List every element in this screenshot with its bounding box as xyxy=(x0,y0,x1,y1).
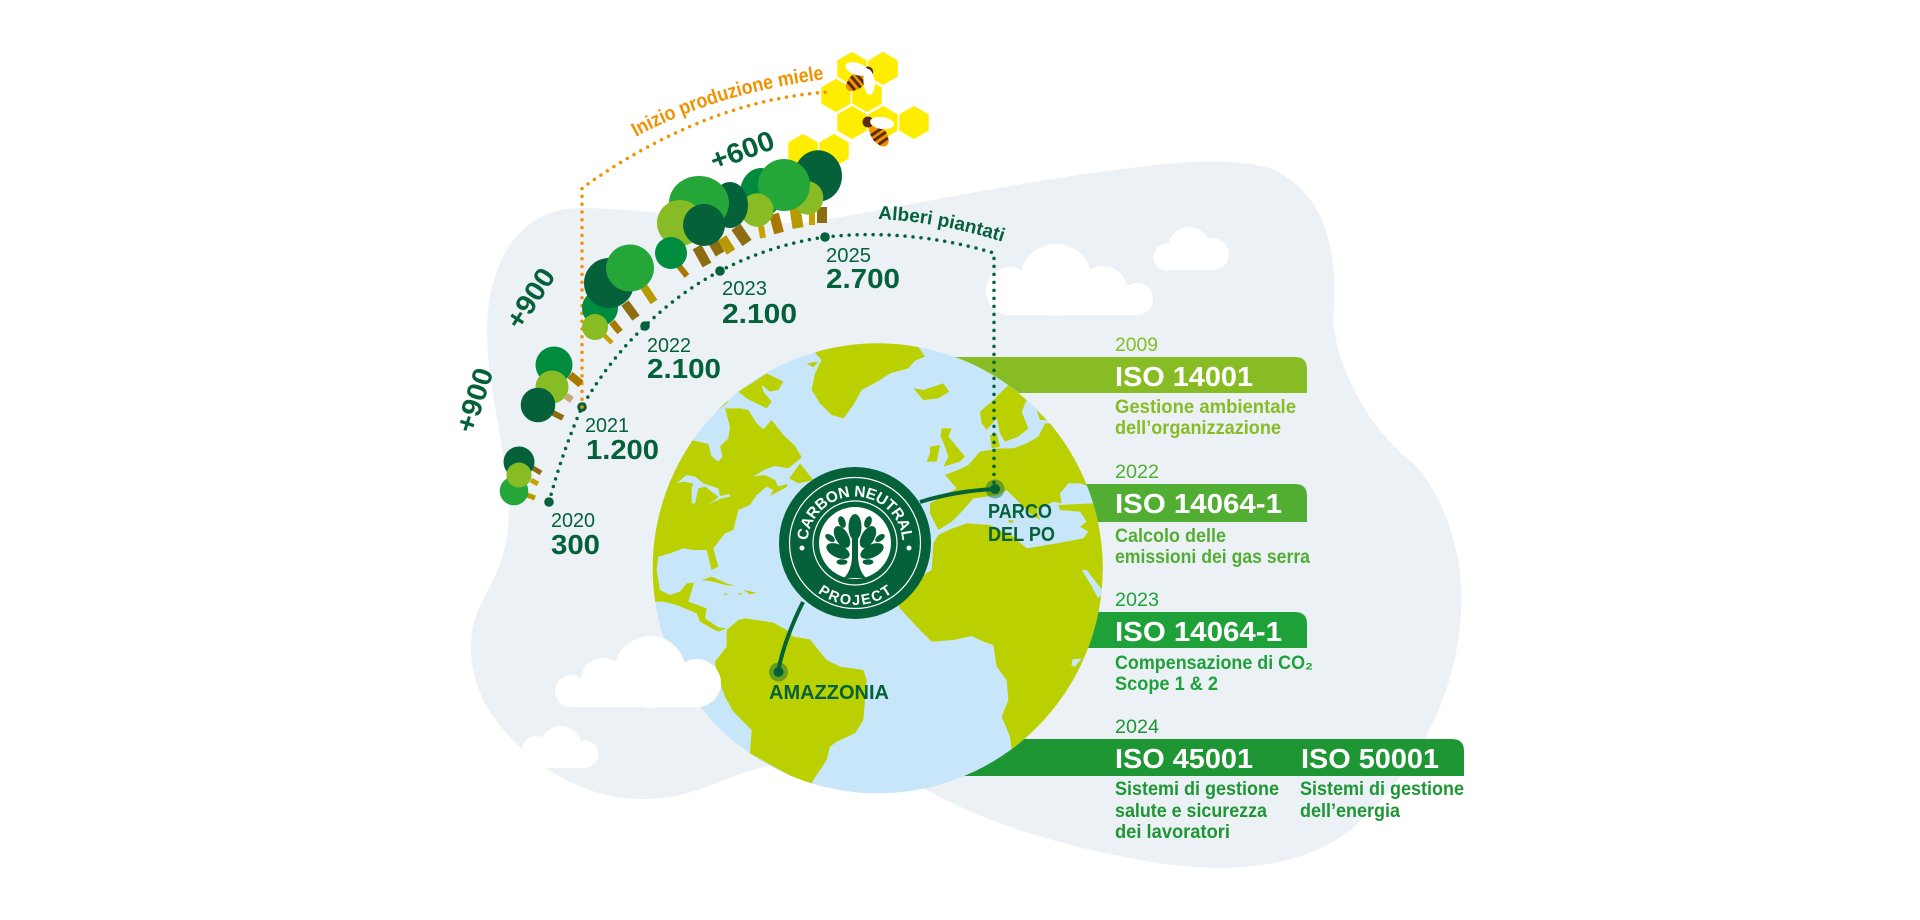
logo text: Carbon Neutral: CARBON NEUTRAL xyxy=(798,486,912,540)
cloud: lower large xyxy=(555,636,721,708)
milestone 2023: 2023 xyxy=(722,278,767,300)
globe xyxy=(643,333,1133,793)
label: Inizio produzione miele: Inizio produzione miele xyxy=(630,66,823,136)
connector lines from logo xyxy=(778,489,995,672)
logo: Carbon Neutral Project xyxy=(779,467,931,619)
milestone 2025: 2.700 xyxy=(826,263,900,294)
certification 2023 text: 2023 xyxy=(1115,589,1159,611)
certification 2022 text: emissioni dei gas serra xyxy=(1115,547,1310,568)
certification 2023 text xyxy=(1115,589,1313,695)
certification 2024 text: Sistemi di gestione xyxy=(1300,779,1464,800)
certification 2009 text xyxy=(1115,334,1296,439)
cloud: lower small xyxy=(522,726,598,768)
milestone 2022: 2.100 xyxy=(647,353,721,384)
label: Amazzonia: AMAZZONIA xyxy=(769,681,889,704)
certification 2009 text: 2009 xyxy=(1115,334,1158,356)
milestone 2021: 2021 xyxy=(585,415,629,437)
certification 2023 text: Scope 1 & 2 xyxy=(1115,674,1218,695)
trees dotted line xyxy=(549,235,994,502)
milestone 2022 xyxy=(647,335,721,384)
certification 2024 text: dei lavoratori xyxy=(1115,822,1230,843)
milestone 2020: 2020 xyxy=(551,510,595,532)
certification 2024 text: ISO 45001 xyxy=(1115,743,1253,774)
ISO bar 2022 xyxy=(1060,484,1307,522)
Lake in Africa xyxy=(1071,658,1082,667)
milestone 2025: 2025 xyxy=(826,245,871,267)
label: Alberi piantati: Alberi piantati xyxy=(878,206,1006,242)
cloud: top right xyxy=(1154,227,1229,270)
milestone 2020: 300 xyxy=(551,529,600,560)
timeline markers xyxy=(544,232,830,507)
background blob xyxy=(471,161,1462,868)
icon: bee lower xyxy=(862,115,895,150)
label: +600: +600 xyxy=(706,125,778,176)
milestone 2023: 2.100 xyxy=(722,298,797,329)
certification 2024 text: ISO 50001 xyxy=(1301,743,1439,774)
certification 2023 text: ISO 14064-1 xyxy=(1115,616,1282,647)
certification 2024 text: dell’energia xyxy=(1300,801,1400,822)
Red Sea xyxy=(1082,570,1103,598)
certification 2022 text: ISO 14064-1 xyxy=(1115,488,1282,519)
certification 2022 text xyxy=(1115,461,1310,568)
milestone 2020 xyxy=(551,510,600,560)
land masses xyxy=(652,343,1103,784)
certification 2024 text: salute e sicurezza xyxy=(1115,801,1267,822)
certification 2024 text: Sistemi di gestione xyxy=(1115,779,1279,800)
location marker: Amazzonia xyxy=(769,662,788,682)
milestone 2022: 2022 xyxy=(647,335,691,357)
certification 2009 text: ISO 14001 xyxy=(1115,361,1253,392)
milestone 2025 xyxy=(826,245,900,294)
certification 2022 text: 2022 xyxy=(1115,461,1159,483)
logo tree icon xyxy=(824,514,886,578)
cloud: top centre xyxy=(986,244,1153,316)
label: +900 upper: +900 xyxy=(499,262,561,334)
certification 2024 text xyxy=(1115,716,1464,843)
location marker: Parco del Po xyxy=(986,480,1004,498)
label: +900 lower: +900 xyxy=(450,364,499,436)
certification 2022 text: Calcolo delle xyxy=(1115,526,1226,547)
certification 2009 text: Gestione ambientale xyxy=(1115,397,1296,418)
ISO bar 2023 xyxy=(1060,612,1307,648)
tree group: trunks xyxy=(527,207,822,498)
honey dotted line xyxy=(582,92,829,407)
ISO bar 2024 xyxy=(940,739,1464,776)
milestone 2021: 1.200 xyxy=(586,434,659,465)
icon: bee upper xyxy=(842,60,877,95)
logo text: Project: PROJECT xyxy=(818,584,890,606)
Great Lakes xyxy=(677,475,730,505)
honeycomb xyxy=(788,51,930,168)
label: Parco del Po: DEL PO xyxy=(988,523,1055,546)
milestone 2021 xyxy=(585,415,659,465)
certification 2024 text: 2024 xyxy=(1115,716,1159,738)
ISO bar 2009 xyxy=(930,357,1307,393)
label: Parco del Po: PARCO xyxy=(988,500,1052,523)
certification 2009 text: dell’organizzazione xyxy=(1115,418,1281,439)
milestone 2023 xyxy=(722,278,797,329)
tree group: crowns xyxy=(500,150,842,505)
certification 2023 text: Compensazione di CO₂ xyxy=(1115,653,1313,674)
